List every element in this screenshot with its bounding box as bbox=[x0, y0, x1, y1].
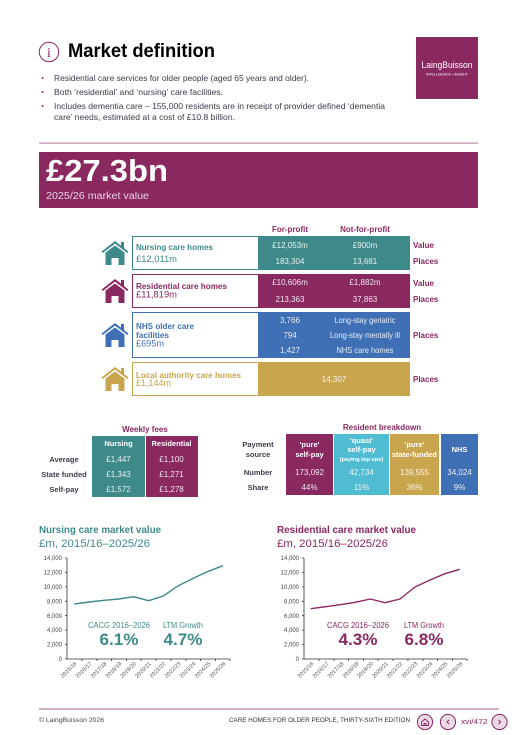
table: resident breakdown: 173,092 bbox=[295, 468, 325, 477]
row: nursing care homes: £12,011m bbox=[136, 254, 177, 264]
banner: market value: 2025/26 market value bbox=[46, 191, 149, 202]
row: local authority care homes bbox=[132, 362, 439, 396]
bullet list: market definition: Residential care services for older people (aged 65 years and older). bbox=[54, 73, 309, 83]
line chart: residential care market value: 2021/22 bbox=[386, 661, 404, 680]
table: weekly fees: State funded bbox=[41, 470, 87, 479]
row: nursing care homes: Places bbox=[413, 257, 439, 266]
line chart: nursing care market value: 2,000 bbox=[47, 642, 63, 648]
table: weekly fees: £1,271 bbox=[159, 470, 184, 479]
table: resident breakdown: 34,024 bbox=[447, 468, 472, 477]
footer: report title: CARE HOMES FOR OLDER PEOPLE, THIRTY-SIXTH EDITION bbox=[229, 717, 410, 724]
table: column headings: For-profit bbox=[272, 225, 308, 234]
heading: residential chart: £m, 2015/16–2025/26 bbox=[277, 538, 388, 550]
logo: LaingBuisson bbox=[422, 60, 472, 71]
line chart: residential care market value: 0 bbox=[296, 657, 300, 663]
heading: nursing chart bbox=[39, 524, 161, 550]
table: resident breakdown: 36% bbox=[406, 483, 423, 492]
icon: information bbox=[39, 42, 59, 62]
line chart: nursing care market value: 2020/21 bbox=[134, 661, 153, 680]
line chart: nursing care market value: 6.1% bbox=[100, 630, 138, 649]
footer: copyright: © LaingBuisson 2026 bbox=[39, 716, 104, 724]
logo: INTELLIGENCE • INSIGHT bbox=[426, 72, 469, 76]
row: residential care homes: Value bbox=[413, 279, 434, 288]
icon: home button bbox=[417, 714, 433, 730]
line chart: residential care market value: 2018/19 bbox=[342, 661, 360, 680]
row: residential care homes: 213,363 bbox=[276, 295, 305, 304]
row: NHS older care facilities: NHS care homes bbox=[336, 346, 394, 355]
line chart: residential care market value: 2017/18 bbox=[327, 661, 345, 680]
line chart: residential care market value: 10,000 bbox=[281, 585, 300, 591]
line chart: residential care market value: 6.8% bbox=[404, 630, 444, 649]
table: weekly fees: Average bbox=[49, 455, 79, 464]
table: resident breakdown: 44% bbox=[301, 483, 318, 492]
table: resident breakdown: 'pure' bbox=[405, 440, 425, 449]
line chart: nursing care market value: 2015/16 bbox=[60, 661, 78, 680]
line chart: nursing care market value: 12,000 bbox=[44, 570, 63, 576]
table: resident breakdown: 42,734 bbox=[349, 468, 374, 477]
table: resident breakdown: Payment bbox=[242, 440, 274, 449]
table: weekly fees: Residential bbox=[151, 439, 192, 448]
table: resident breakdown: Number bbox=[244, 468, 272, 477]
line chart: residential care market value: 2015/16 bbox=[297, 661, 315, 680]
row: residential care homes: 37,863 bbox=[353, 295, 378, 304]
line chart: nursing care market value: LTM Growth bbox=[163, 620, 203, 630]
bullet list: market definition: Both ‘residential’ and ‘nursing’ care facilities. bbox=[54, 87, 223, 97]
table: resident breakdown: source bbox=[246, 450, 270, 459]
row: nursing care homes: £900m bbox=[353, 241, 378, 250]
line chart: nursing care market value: 6,000 bbox=[47, 614, 63, 620]
line chart: nursing care market value: 4,000 bbox=[47, 628, 63, 634]
line chart: nursing care market value: 2021/22 bbox=[149, 661, 167, 680]
table: weekly fees: £1,447 bbox=[106, 455, 131, 464]
line chart: nursing care market value: 2025/26 bbox=[209, 661, 227, 680]
table: resident breakdown: Share bbox=[248, 483, 268, 492]
bullet list: market definition: care’ needs, estimated at a cost of £10.8 billion. bbox=[54, 112, 235, 122]
row: residential care homes: £11,819m bbox=[136, 290, 177, 300]
line chart: residential care market value: 2023/24 bbox=[416, 661, 434, 680]
line chart: nursing care market value: 2019/20 bbox=[119, 661, 138, 680]
row: NHS older care facilities: NHS older care bbox=[136, 322, 195, 331]
table: weekly fees: £1,100 bbox=[159, 455, 184, 464]
banner: market value bbox=[39, 152, 478, 208]
line chart: residential care market value: 2020/21 bbox=[371, 661, 390, 680]
logo bbox=[416, 37, 478, 99]
line chart: nursing care market value: 4.7% bbox=[164, 630, 202, 649]
table: resident breakdown: 139,555 bbox=[400, 468, 430, 477]
icon: gold house bbox=[102, 367, 128, 391]
line chart: nursing care market value: 2016/17 bbox=[75, 661, 93, 680]
bullet list: market definition bbox=[42, 73, 385, 122]
row: NHS older care facilities: 794 bbox=[283, 331, 297, 340]
line chart: residential care market value: CACG 2016–2026 bbox=[327, 620, 389, 630]
row: nursing care homes: Value bbox=[413, 241, 434, 250]
row: local authority care homes: 14,307 bbox=[322, 375, 347, 384]
line chart: nursing care market value: 2017/18 bbox=[90, 661, 108, 680]
table: resident breakdown: self-pay bbox=[295, 450, 324, 459]
table: resident breakdown: 11% bbox=[354, 483, 369, 492]
table: resident breakdown: 9% bbox=[454, 483, 465, 492]
icon: blue house bbox=[102, 323, 128, 347]
row: NHS older care facilities: Long-stay mentally ill bbox=[330, 331, 400, 340]
table: resident breakdown bbox=[242, 423, 478, 495]
page number: xvi/472 bbox=[461, 717, 488, 726]
line chart: residential care market value: 2,000 bbox=[284, 642, 300, 648]
line chart: residential care market value: 2016/17 bbox=[312, 661, 330, 680]
row: NHS older care facilities: 1,427 bbox=[280, 346, 301, 355]
line chart: residential care market value: LTM Growth bbox=[404, 620, 444, 630]
heading: residential chart bbox=[277, 524, 416, 550]
table: weekly fees: £1,343 bbox=[106, 470, 131, 479]
line chart: residential care market value: 12,000 bbox=[281, 570, 300, 576]
line chart: nursing care market value: 2022/23 bbox=[164, 661, 182, 680]
line chart: nursing care market value: 2024/25 bbox=[194, 661, 212, 680]
line chart: residential care market value: 4,000 bbox=[284, 628, 300, 634]
table: resident breakdown: Resident breakdown bbox=[343, 423, 421, 432]
line chart: residential care market value: 8,000 bbox=[284, 600, 300, 606]
icon: teal house bbox=[102, 241, 128, 265]
banner: market value: £27.3bn bbox=[46, 153, 168, 188]
table: weekly fees: £1,278 bbox=[159, 485, 184, 494]
table: column headings bbox=[272, 225, 390, 234]
table: weekly fees: Self-pay bbox=[49, 485, 79, 494]
line chart: residential care market value: 14,000 bbox=[281, 556, 300, 562]
line chart: residential care market value: 2025/26 bbox=[446, 661, 464, 680]
title: Market definition bbox=[68, 40, 215, 62]
line chart: residential care market value: 2022/23 bbox=[401, 661, 419, 680]
row: NHS older care facilities: 3,766 bbox=[280, 316, 301, 325]
row: nursing care homes bbox=[132, 236, 439, 270]
line chart: nursing care market value: CACG 2016–2026 bbox=[88, 620, 150, 630]
icon: information: i bbox=[47, 46, 51, 61]
line chart: residential care market value: 4.3% bbox=[338, 630, 378, 649]
table: weekly fees: £1,572 bbox=[106, 485, 131, 494]
bullet list: market definition: Includes dementia care – 155,000 residents are in receipt of provider defined ‘dementia bbox=[54, 101, 385, 111]
line chart: residential care market value: 2019/20 bbox=[356, 661, 375, 680]
row: local authority care homes: Places bbox=[413, 375, 439, 384]
row: residential care homes: £10,606m bbox=[272, 278, 308, 287]
icon: purple house bbox=[102, 279, 128, 303]
row: NHS older care facilities: £695m bbox=[136, 338, 164, 348]
heading: nursing chart: Nursing care market value bbox=[39, 524, 161, 536]
row: local authority care homes: Local authority care homes bbox=[136, 371, 242, 380]
line chart: nursing care market value: 2018/19 bbox=[105, 661, 123, 680]
line chart: residential care market value: 2024/25 bbox=[431, 661, 449, 680]
table: resident breakdown: NHS bbox=[452, 445, 467, 454]
table: resident breakdown: 'quasi' bbox=[350, 436, 373, 445]
line chart: residential care market value bbox=[281, 556, 467, 680]
line chart: residential care market value: 6,000 bbox=[284, 614, 300, 620]
row: nursing care homes: 13,681 bbox=[353, 257, 378, 266]
row: NHS older care facilities: Long-stay geriatric bbox=[334, 316, 396, 325]
row: local authority care homes: £1,144m bbox=[136, 378, 171, 388]
line chart: nursing care market value: 0 bbox=[59, 657, 63, 663]
row: NHS older care facilities: Places bbox=[413, 331, 439, 340]
icon: previous button bbox=[440, 714, 456, 730]
row: residential care homes: £1,882m bbox=[349, 278, 381, 287]
heading: residential chart: Residential care market value bbox=[277, 524, 416, 536]
icon: next button bbox=[492, 714, 507, 730]
table: weekly fees: Weekly fees bbox=[122, 425, 168, 434]
row: nursing care homes: Nursing care homes bbox=[136, 243, 214, 252]
line chart: nursing care market value bbox=[44, 556, 230, 680]
row: nursing care homes: £12,053m bbox=[272, 241, 308, 250]
row: NHS older care facilities bbox=[132, 312, 439, 358]
line chart: nursing care market value: 14,000 bbox=[44, 556, 63, 562]
table: resident breakdown: (paying top ups) bbox=[340, 457, 383, 463]
line chart: nursing care market value: 10,000 bbox=[44, 585, 63, 591]
table: resident breakdown: self-pay bbox=[347, 445, 376, 454]
row: residential care homes bbox=[132, 274, 439, 308]
row: NHS older care facilities: facilities bbox=[136, 331, 170, 340]
table: resident breakdown: state-funded bbox=[392, 450, 437, 459]
table: weekly fees: Nursing bbox=[104, 439, 133, 448]
row: nursing care homes: 183,304 bbox=[276, 257, 305, 266]
row: residential care homes: Residential care homes bbox=[136, 282, 228, 291]
heading: nursing chart: £m, 2015/16–2025/26 bbox=[39, 538, 150, 550]
row: residential care homes: Places bbox=[413, 295, 439, 304]
line chart: nursing care market value: 8,000 bbox=[47, 600, 63, 606]
line chart: nursing care market value: 2023/24 bbox=[179, 661, 197, 680]
table: weekly fees bbox=[41, 425, 198, 497]
table: column headings: Not-for-profit bbox=[340, 225, 390, 234]
table: resident breakdown: 'pure' bbox=[300, 440, 320, 449]
